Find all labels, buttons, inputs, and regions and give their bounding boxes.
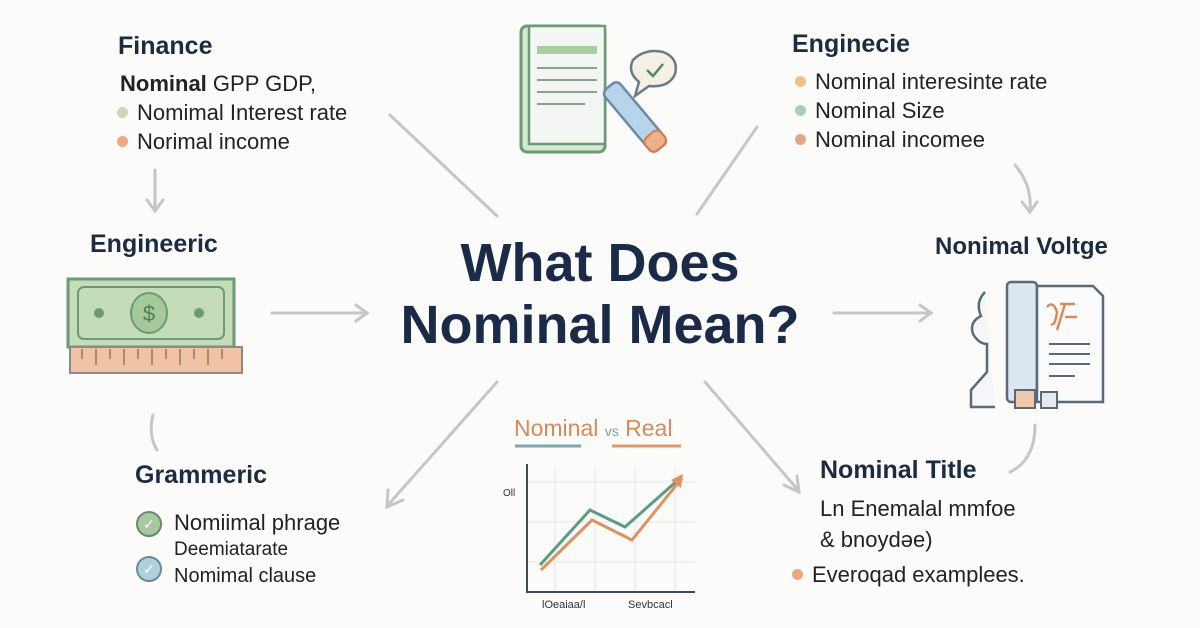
panel: nominal title: Nominal Title <box>820 456 977 484</box>
panel: finance: Nomimal Interest rate <box>137 100 347 125</box>
chart: nominal vs real: Nominal vs Real <box>514 415 672 441</box>
icon: machine with document <box>970 280 1104 409</box>
chart: nominal vs real: lOeaiaa/l <box>542 599 585 611</box>
panel: nominal title: Everoqad examplees. <box>812 562 1025 587</box>
icon: dollar bill with ruler <box>66 278 243 374</box>
chart: nominal vs real: Sevbcacl <box>628 599 673 611</box>
icon: check green: ✓ <box>143 516 155 532</box>
title: What Does <box>460 233 740 293</box>
heading: engineeric: Engineeric <box>90 230 218 258</box>
panel: finance: Norimal income <box>137 129 290 154</box>
panel: finance: Finance <box>118 32 212 60</box>
panel: enginecie: Nominal interesinte rate <box>815 69 1047 94</box>
panel: enginecie: Enginecie <box>792 30 910 58</box>
panel: grammeric: Grammeric <box>135 461 267 489</box>
panel: finance <box>117 32 347 154</box>
title: Nominal Mean? <box>400 295 800 355</box>
panel: nominal title: & bnoydǝe) <box>820 527 933 552</box>
chart: nominal vs real: Oll <box>503 488 515 499</box>
panel: grammeric: Nomiimal phrage <box>174 510 340 535</box>
icon: check blue <box>136 556 162 582</box>
panel: enginecie: Nominal incomee <box>815 127 985 152</box>
panel: grammeric <box>135 461 340 587</box>
icon: dollar bill with ruler: $ <box>143 301 155 326</box>
panel: enginecie <box>792 30 1047 152</box>
panel: finance: Nominal GPP GDP, <box>120 71 316 96</box>
icon: check blue: ✓ <box>143 561 155 577</box>
panel: nominal title: Ln Enemalal mmfoe <box>820 496 1016 521</box>
title <box>400 233 800 355</box>
panel: nominal title <box>792 456 1025 587</box>
chart: nominal vs real <box>503 415 695 611</box>
icon: book with ruler and speech bubble <box>520 24 678 154</box>
panel: grammeric: Nomimal clause <box>174 565 316 587</box>
icon: check green <box>136 511 162 537</box>
heading: nominal voltage: Nonimal Voltge <box>935 233 1108 260</box>
panel: enginecie: Nominal Size <box>815 98 945 123</box>
panel: grammeric: Deemiatarate <box>174 539 288 560</box>
